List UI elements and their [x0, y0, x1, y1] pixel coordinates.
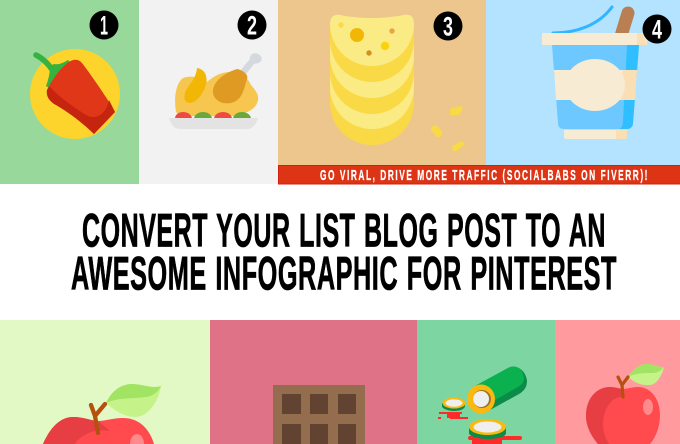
number badge 2 [238, 10, 266, 40]
panel 6: chocolate bar [210, 320, 417, 444]
number badge 1 [90, 10, 118, 40]
panel 3: chips [278, 0, 486, 184]
number badge 1: 1 [100, 10, 108, 40]
number badge 4: 4 [652, 14, 662, 44]
number badge 3: 3 [443, 12, 453, 42]
panel 5: green apple panel [0, 320, 210, 444]
number badge 3 [434, 12, 462, 42]
panel 4: yogurt cup [486, 0, 680, 184]
number badge 4 [642, 14, 672, 44]
panel 2: roast chicken [139, 0, 278, 184]
title [71, 204, 617, 300]
panel 1: pepper [0, 0, 139, 184]
number badge 2: 2 [247, 10, 257, 40]
panel 7: sliced zucchini [417, 320, 555, 444]
panel 8: red apple panel [555, 320, 680, 444]
